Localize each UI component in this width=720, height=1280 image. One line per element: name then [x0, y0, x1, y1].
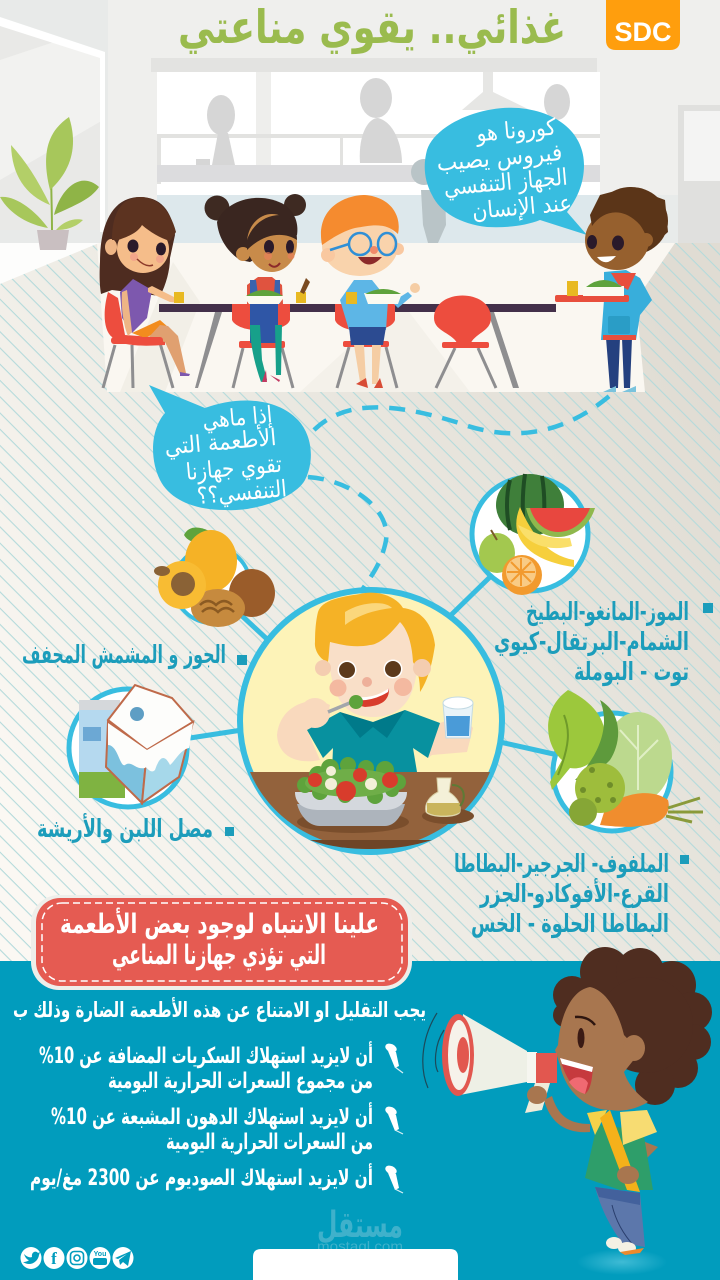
watermark: مستقل: [317, 1205, 403, 1246]
speech bubble: coronavirus: كورونا هو: [474, 114, 557, 147]
item: added sugars: من مجموع السعرات الحرارية اليومية: [108, 1069, 373, 1094]
label: whey and ricotta: مصل اللبن والأريشة: [37, 813, 213, 844]
arm: [544, 1096, 590, 1132]
social media icons: [20, 1247, 134, 1269]
speech bubble: question: تقوي جهازنا: [185, 452, 283, 486]
character: boy with tray: [555, 187, 668, 392]
intro sentence: يجب التقليل او الامتناع عن هذه الأطعمة الضارة وذلك ب: [13, 996, 426, 1022]
empty red chair: [434, 296, 496, 388]
shirt: [585, 1125, 653, 1190]
label: walnut and apricot: [22, 640, 247, 670]
footer panel: [0, 961, 720, 1280]
speech bubble: coronavirus: [425, 108, 587, 235]
walnut and apricot illustration: [154, 527, 275, 627]
warning panel: علينا الانتباه لوجود بعض الأطعمة: [60, 907, 379, 940]
icon: plant: [0, 117, 99, 250]
watermark: [317, 1205, 403, 1254]
warning panel: [31, 895, 412, 990]
SDC logo: [606, 0, 680, 50]
face: [555, 987, 648, 1111]
speech bubble: question: التنفسي؟؟: [196, 476, 288, 510]
item: added sugars: [39, 1040, 403, 1094]
megaphone: [423, 1013, 557, 1113]
banana: [516, 507, 574, 567]
label: fruits list: [494, 597, 713, 687]
hair: [553, 947, 712, 1105]
table: [159, 304, 556, 388]
label: vegetables list: [454, 849, 689, 939]
icon: facebook: f: [51, 1249, 57, 1268]
vegetable illustration: [548, 690, 703, 831]
character: girl with buns: [204, 194, 310, 388]
item: saturated fats: من السعرات الحرارية اليومية: [166, 1130, 373, 1155]
central illustration: boy eating salad: [240, 590, 502, 852]
title: غذائي.. يقوي مناعتي: [178, 0, 566, 54]
icon: telegram: [115, 1251, 131, 1266]
warning panel: التي تؤذي جهازنا المناعي: [112, 940, 326, 971]
connector lines: [190, 577, 558, 755]
speech bubble: coronavirus: عند الإنسان: [471, 190, 573, 225]
speech bubble: question: إذا ماهي: [201, 402, 273, 434]
kitchen staff silhouettes: [196, 78, 570, 165]
icon: twitter: [23, 1252, 40, 1264]
orange: [502, 555, 542, 595]
legs: [595, 1187, 645, 1247]
child silhouette: [411, 159, 446, 243]
item: sodium: أن لايزيد استهلاك الصوديوم عن 2300 مغ/يوم: [30, 1162, 373, 1191]
white box: [253, 1249, 458, 1280]
speech bubble: question: [149, 385, 311, 512]
watermark: mostaql.com: [317, 1238, 403, 1254]
character: boy with megaphone: [423, 947, 712, 1275]
dashed path from first bubble: [314, 392, 614, 433]
character: girl with long hair: [100, 197, 190, 388]
shadow: [577, 1249, 667, 1275]
speech bubble: question: الأطعمة التي: [163, 423, 277, 461]
hatched floor and page background: [0, 243, 720, 963]
watermelon: [496, 474, 564, 536]
cafeteria background: [0, 0, 720, 332]
item: saturated fats: [51, 1101, 403, 1155]
item: added sugars: أن لايزيد استهلاك السكريات المضافة عن 10%: [39, 1040, 373, 1069]
character: boy with glasses: [321, 195, 420, 388]
speech bubble: coronavirus: الجهاز التنفسي: [443, 165, 569, 201]
salad bowl: [295, 757, 409, 833]
fruit illustration: [472, 474, 595, 595]
SDC logo: SDC: [614, 17, 672, 47]
speech bubble: coronavirus: فيروس يصيب: [436, 140, 563, 177]
dashed path from second bubble: [308, 477, 386, 590]
list: dietary limits: [30, 1040, 403, 1193]
apple: [479, 533, 515, 573]
icon: youtube: You: [94, 1251, 106, 1258]
label: walnut and apricot: الجوز و المشمش المجفف: [22, 640, 226, 670]
item: sodium: [30, 1162, 403, 1193]
milk illustration: [69, 685, 193, 807]
icon: instagram: [70, 1252, 84, 1264]
item: saturated fats: أن لايزيد استهلاك الدهون المشبعة عن 10%: [51, 1101, 373, 1130]
oil bottle: [422, 778, 474, 824]
